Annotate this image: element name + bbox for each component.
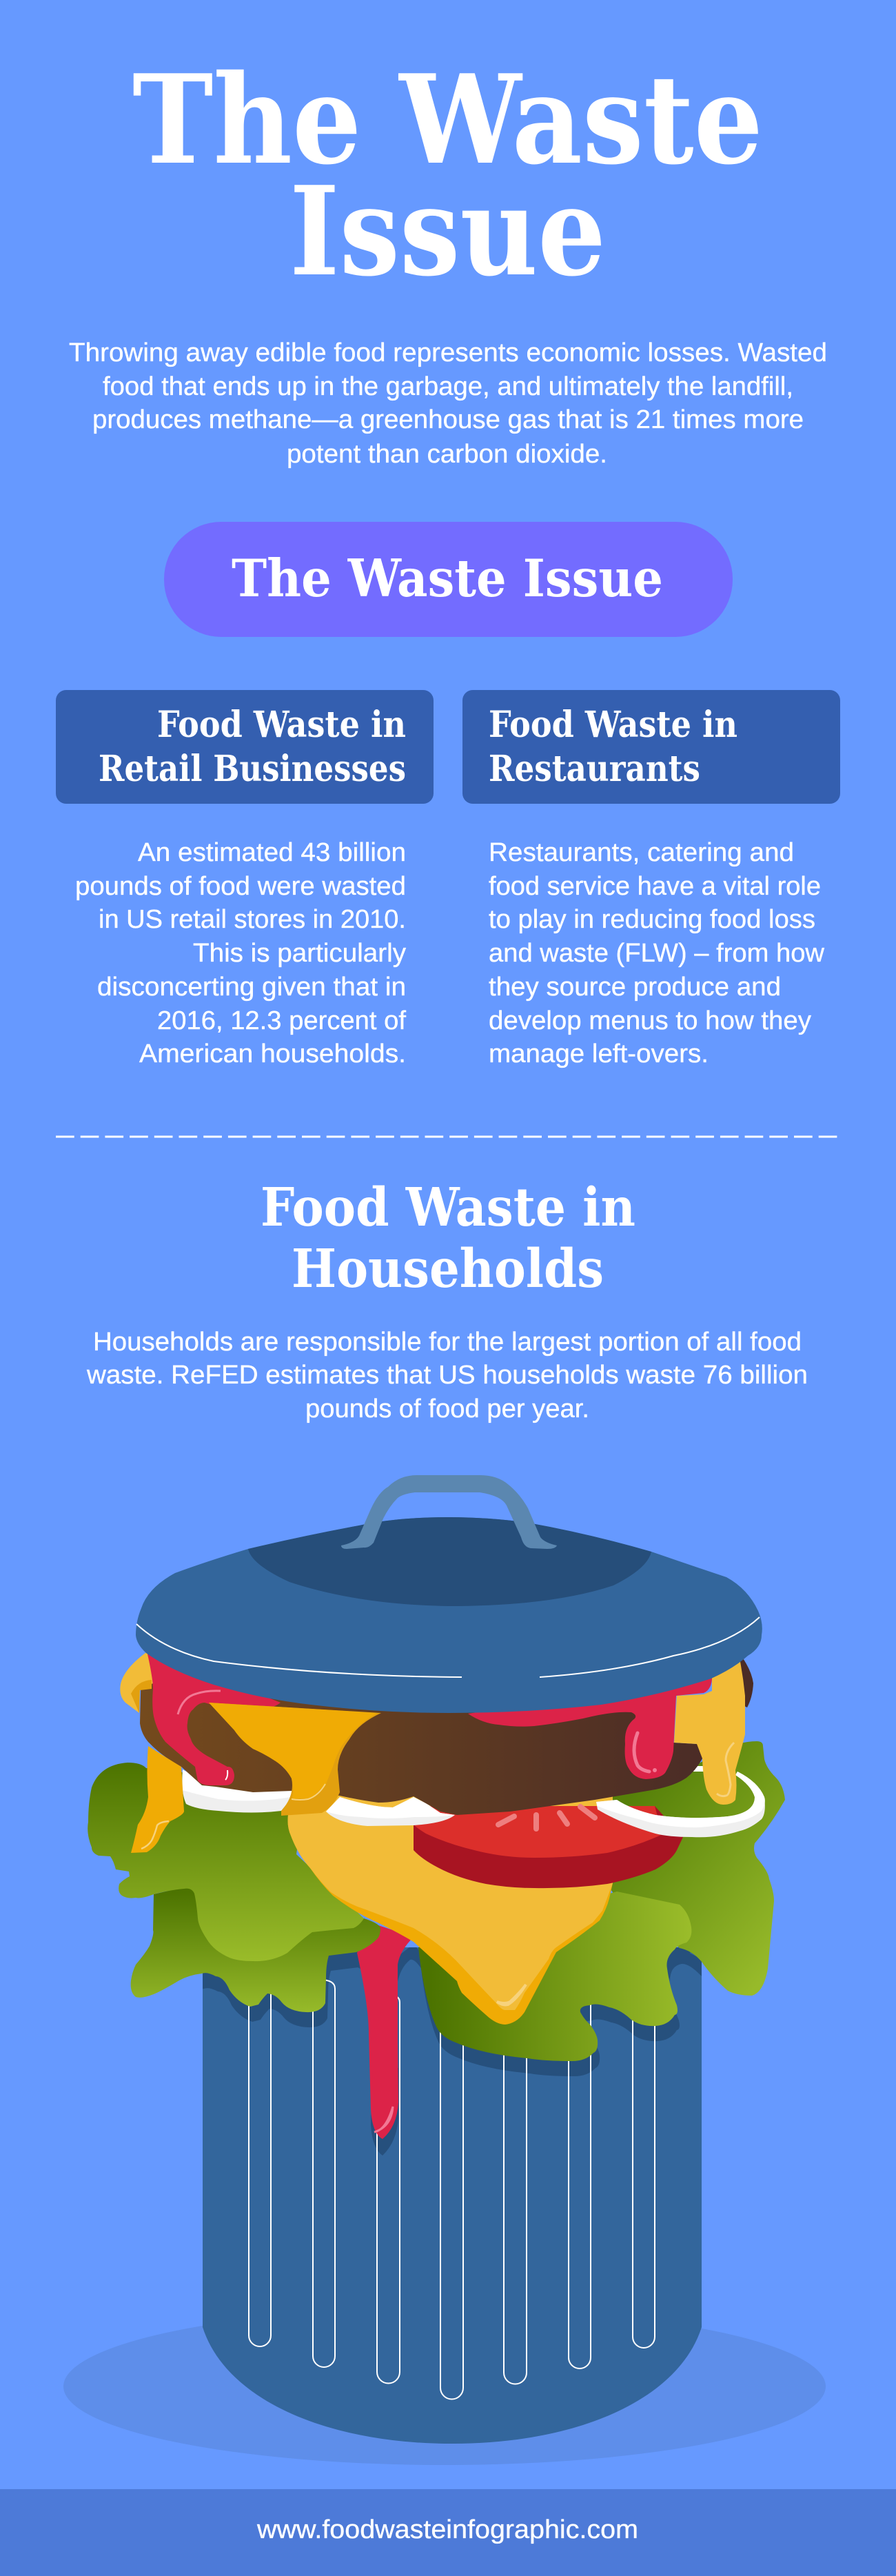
retail text block: disconcerting given that in <box>97 973 406 1002</box>
illustration: trash can overflowing with burger <box>63 1475 826 2465</box>
onion rings <box>182 1766 765 1837</box>
title <box>132 48 763 303</box>
restaurants text block: to play in reducing food loss <box>489 905 815 934</box>
can ribs <box>249 1978 655 2400</box>
households text block <box>86 1328 808 1423</box>
households heading: Food Waste in <box>261 1177 635 1239</box>
retail text block: in US retail stores in 2010. <box>99 905 406 934</box>
footer band: www.foodwasteinfographic.com <box>256 2515 638 2544</box>
title: Issue <box>289 159 606 303</box>
panel: restaurants heading: Food Waste in <box>489 704 737 746</box>
restaurants text block: develop menus to how they <box>489 1006 811 1035</box>
ketchup right <box>468 1672 712 1779</box>
panel: retail businesses heading: Retail Businesses <box>99 748 406 790</box>
burger patty <box>140 1651 753 1815</box>
title: The Waste <box>132 48 763 192</box>
intro text block: potent than carbon dioxide. <box>287 440 607 469</box>
intro text block <box>69 338 827 469</box>
intro text block: Throwing away edible food represents economic losses. Wasted <box>69 338 827 367</box>
panel: retail businesses heading <box>56 690 434 804</box>
retail text block: American households. <box>139 1039 406 1068</box>
tomato slice <box>414 1806 683 1888</box>
panel: retail businesses heading: Food Waste in <box>157 704 406 746</box>
cheese melt far left <box>131 1746 184 1853</box>
restaurants text block: food service have a vital role <box>489 872 821 901</box>
ground shadow <box>63 2308 826 2465</box>
retail text block: This is particularly <box>193 939 406 968</box>
cheese slice <box>288 1792 613 2025</box>
households text block: Households are responsible for the largest portion of all food <box>93 1328 802 1357</box>
trash can lid <box>136 1475 762 1713</box>
restaurants text block: manage left-overs. <box>489 1039 709 1068</box>
ketchup left <box>147 1651 281 1785</box>
lettuce lower left <box>131 1882 380 2012</box>
retail text block: pounds of food were wasted <box>75 872 406 901</box>
cheese melt right <box>674 1654 745 1805</box>
lettuce back right <box>607 1741 785 1996</box>
panel: restaurants heading <box>462 690 840 804</box>
intro text block: food that ends up in the garbage, and ultimately the landfill, <box>103 372 793 401</box>
restaurants text block: and waste (FLW) – from how <box>489 939 825 968</box>
lettuce front right <box>418 1892 691 2061</box>
lettuce upper left <box>88 1763 364 1961</box>
restaurants text block: they source produce and <box>489 973 781 1002</box>
cheese melt center <box>209 1703 381 1816</box>
retail text block <box>75 838 406 1068</box>
cheese melt top left <box>120 1651 153 1713</box>
panel: restaurants heading: Restaurants <box>489 748 700 790</box>
retail text block: 2016, 12.3 percent of <box>157 1006 406 1035</box>
households heading <box>261 1177 635 1300</box>
households text block: waste. ReFED estimates that US households waste 76 billion <box>86 1361 808 1390</box>
households text block: pounds of food per year. <box>305 1395 589 1423</box>
section pill heading: The Waste Issue <box>232 548 663 609</box>
restaurants text block <box>489 838 825 1068</box>
section pill heading <box>164 522 733 637</box>
retail text block: An estimated 43 billion <box>138 838 406 867</box>
restaurants text block: Restaurants, catering and <box>489 838 794 867</box>
lid handle <box>341 1475 557 1549</box>
ketchup long drip <box>357 1923 414 2139</box>
intro text block: produces methane—a greenhouse gas that is 21 times more <box>92 405 804 434</box>
footer band <box>0 2489 896 2576</box>
trash can body <box>203 1947 702 2444</box>
households heading: Households <box>292 1238 604 1300</box>
